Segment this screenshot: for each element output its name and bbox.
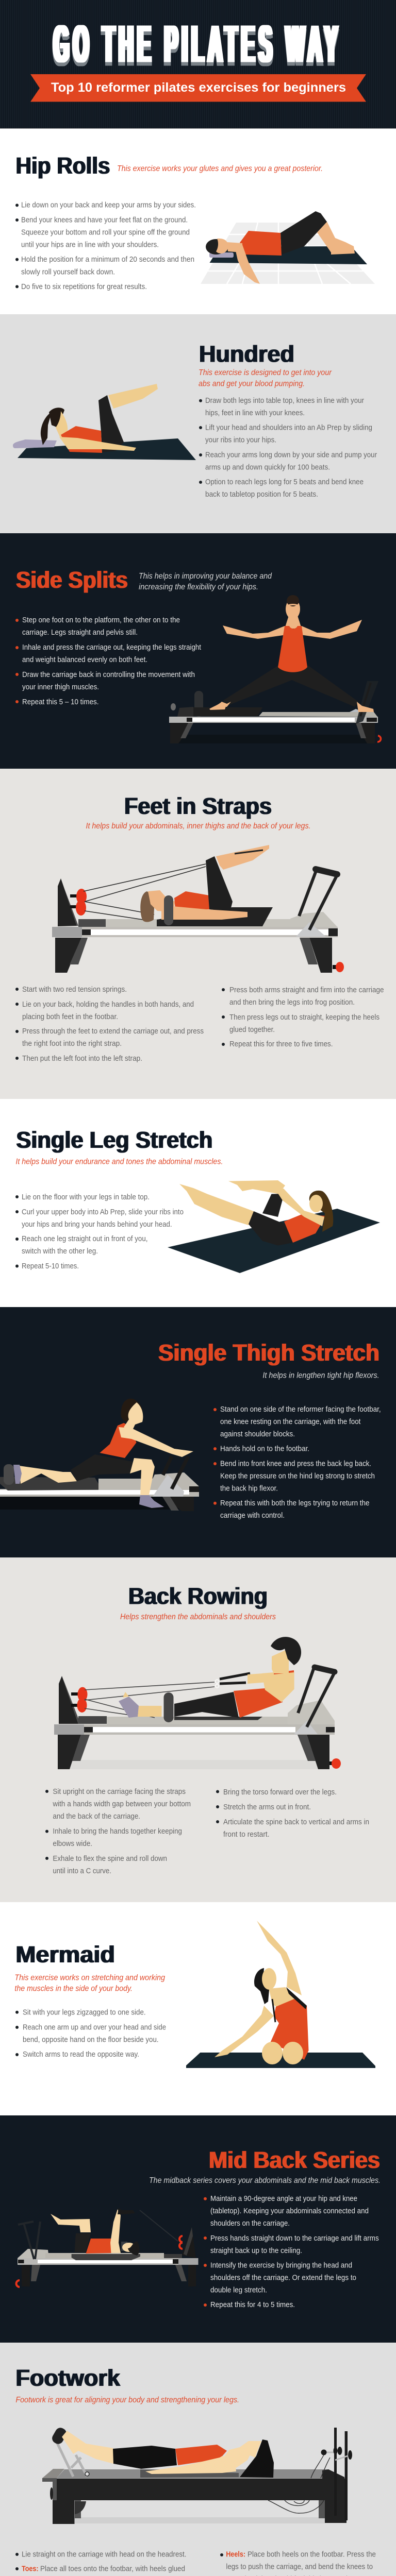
floor tiles xyxy=(201,223,375,284)
bullet list: Do five to six repetitions for great results. xyxy=(21,282,147,291)
illustration: back rowing xyxy=(54,1637,341,1769)
reformer xyxy=(52,864,344,973)
subtitle: It helps build your endurance and tones the abdominal muscles. xyxy=(15,1158,223,1166)
illustration: hundred xyxy=(13,384,196,460)
illustration: mid back series xyxy=(16,2208,199,2287)
subtitle: increasing the flexibility of your hips. xyxy=(139,583,258,591)
bullet list xyxy=(204,2194,379,2309)
bullet list: right: legs to push the carriage, and bend the knees to xyxy=(226,2563,373,2571)
person xyxy=(41,384,158,453)
bullet list: Hold the position for a minimum of 20 seconds and then xyxy=(21,255,194,264)
bullet list: left: Start with two red tension springs. xyxy=(22,985,127,994)
bullet list: Repeat 5-10 times. xyxy=(22,1262,79,1270)
mat xyxy=(209,246,367,264)
bullet list xyxy=(15,201,196,291)
subtitle: This helps in improving your balance and xyxy=(139,572,272,581)
bullet list: hips, feet in line with your knees. xyxy=(205,409,305,417)
person xyxy=(62,2431,274,2478)
bullet list: Bend into front knee and press the back leg back. xyxy=(220,1460,371,1468)
illustration: feet in straps xyxy=(52,845,344,973)
mat xyxy=(186,2053,375,2068)
pillow xyxy=(209,252,234,258)
bullet list: Reach your arms long down by your side and pump your xyxy=(205,450,377,460)
bullet list: shoulders off the carriage. Or extend the legs to xyxy=(210,2274,356,2282)
reformer xyxy=(42,2426,352,2524)
bullet list: Inhale and press the carriage out, keeping the legs straight xyxy=(22,643,202,652)
bullet list: left: Sit upright on the carriage facing the straps xyxy=(53,1787,186,1796)
heading: single leg stretch: Single Leg Stretch xyxy=(16,1127,212,1153)
bullet list: arms up and down quickly for 100 beats. xyxy=(205,463,330,472)
bullet list: right: glued together. xyxy=(229,1025,275,1034)
heading: single thigh stretch: Single Thigh Stretch xyxy=(158,1340,380,1366)
bullet list: your hips and bring your hands behind your head. xyxy=(22,1220,172,1229)
bullet list xyxy=(199,396,377,499)
bullet list: shoulders on the carriage. xyxy=(210,2219,290,2228)
bullet list: left: Place all toes onto the footbar, with heels glued xyxy=(40,2565,185,2573)
bullet list: left xyxy=(15,2550,201,2576)
heading: mermaid: Mermaid xyxy=(15,1941,115,1968)
bullet list: your inner thigh muscles. xyxy=(22,683,99,691)
illustration: side splits xyxy=(169,595,381,743)
subtitle: This exercise works your glutes and gives you a great posterior. xyxy=(117,164,323,173)
panel: single leg stretch xyxy=(0,1099,396,1307)
bullet list: Maintain a 90-degree angle at your hip and knee xyxy=(210,2194,357,2203)
heading: side splits: Side Splits xyxy=(16,567,128,593)
bullet list: right: Stretch the arms out in front. xyxy=(223,1803,311,1811)
bullet list: Reach one leg straight out in front of you, xyxy=(22,1234,147,1243)
heading: mid back series: Mid Back Series xyxy=(209,2147,380,2173)
bullet list: Keep the pressure on the hind leg strong to stretch xyxy=(220,1472,375,1481)
bullet list: left: Inhale to bring the hands together keeping xyxy=(53,1827,182,1836)
subtitle: abs and get your blood pumping. xyxy=(199,379,305,388)
panel: single thigh stretch xyxy=(0,1307,396,1557)
bullet list: switch with the other leg. xyxy=(22,1247,98,1256)
bullet list: right: Then press legs out to straight, keeping the heels xyxy=(229,1013,380,1022)
subtitle: the muscles in the side of your body. xyxy=(14,1985,133,1993)
bullet list: right: Heels: xyxy=(226,2550,245,2559)
panel: feet in straps xyxy=(0,769,396,1099)
subtitle xyxy=(139,572,272,591)
bullet list xyxy=(15,1193,184,1270)
ribbon banner: Top 10 reformer pilates exercises for beginners xyxy=(51,80,346,95)
bullet list: straight back up to the ceiling. xyxy=(210,2246,302,2255)
bullet list: carriage with control. xyxy=(220,1511,285,1520)
bullet list: Draw both legs into table top, knees in line with your xyxy=(205,396,364,405)
person xyxy=(13,1399,193,1508)
person xyxy=(179,1180,333,1246)
bullet list: left: Then put the left foot into the left strap. xyxy=(22,1054,142,1063)
bullet list: Press hands straight down to the carriage and lift arms xyxy=(210,2234,379,2243)
bullet list xyxy=(213,1405,381,1520)
bullet list: Option to reach legs long for 5 beats and bend knee xyxy=(205,478,364,486)
panel: mid back series xyxy=(0,2115,396,2343)
bullet list: Squeeze your bottom and roll your spine off the ground xyxy=(21,228,190,236)
subtitle: This exercise works on stretching and working xyxy=(14,1974,165,1982)
subtitle: Helps strengthen the abdominals and shoulders xyxy=(120,1613,276,1621)
ribbon banner xyxy=(30,74,366,102)
bullet list: left: with a hands width gap between your bottom xyxy=(52,1800,191,1808)
subtitle: It helps in lengthen tight hip flexors. xyxy=(262,1371,380,1380)
bullet list: Bend your knees and have your feet flat on the ground. xyxy=(21,215,188,224)
reformer xyxy=(0,1456,199,1511)
person xyxy=(209,595,374,712)
bullet list: right: Press both arms straight and firm into the carriage xyxy=(229,986,384,994)
reformer xyxy=(16,2210,199,2287)
bullet list: right: Place both heels on the footbar. Press the xyxy=(248,2550,376,2559)
person xyxy=(51,2208,140,2260)
panel: mermaid xyxy=(0,1902,396,2115)
person xyxy=(119,1637,301,1722)
bullet list: right xyxy=(222,986,384,1048)
bullet list: Draw the carriage back in controlling the movement with xyxy=(22,670,195,679)
bullet list: until your hips are in line with your shoulders. xyxy=(21,240,159,249)
bullet list: Stand on one side of the reformer facing the footbar, xyxy=(220,1405,381,1414)
subtitle xyxy=(14,1974,165,1993)
bullet list: (tabletop). Keeping your abdominals connected and xyxy=(210,2207,369,2215)
heading: back rowing: Back Rowing xyxy=(128,1583,268,1609)
illustration: footwork xyxy=(42,2426,352,2524)
pillow xyxy=(13,439,57,448)
bullet list: left: until into a C curve. xyxy=(53,1867,111,1875)
bullet list: and weight balanced evenly on both feet. xyxy=(22,655,147,664)
bullet list: Curl your upper body into Ab Prep, slide your ribs into xyxy=(22,1208,184,1216)
bullet list: right: Repeat this for three to five times. xyxy=(229,1040,333,1048)
reformer xyxy=(54,1666,341,1769)
subtitle: Footwork is great for aligning your body and strengthening your legs. xyxy=(15,2396,239,2404)
bullet list: carriage. Legs straight and pelvis still. xyxy=(22,628,138,637)
panel: header xyxy=(0,0,396,129)
bullet list: left: Lie straight on the carriage with head on the headrest. xyxy=(22,2550,187,2559)
bullet list: the back hip flexor. xyxy=(220,1484,278,1493)
bullet list: left: placing both feet in the footbar. xyxy=(22,1012,118,1021)
panel: hundred xyxy=(0,314,396,533)
illustration: single leg stretch xyxy=(168,1180,380,1273)
subtitle: It helps build your abdominals, inner thighs and the back of your legs. xyxy=(86,822,310,831)
panel: side splits xyxy=(0,533,396,769)
bullet list: left: Exhale to flex the spine and roll down xyxy=(53,1854,167,1863)
panel: hip rolls xyxy=(0,129,396,314)
reformer xyxy=(169,681,381,743)
heading: hundred: Hundred xyxy=(199,341,294,367)
bullet list: Reach one arm up and over your head and side xyxy=(23,2023,166,2032)
subtitle xyxy=(199,368,332,388)
bullet list: Intensify the exercise by bringing the head and xyxy=(210,2261,352,2270)
bullet list: right: Bring the torso forward over the legs. xyxy=(223,1788,337,1797)
bullet list: left: Press through the feet to extend the carriage out, and press xyxy=(22,1027,204,1036)
bullet list: one knee resting on the carriage, with the foot xyxy=(220,1417,361,1426)
illustration: hip rolls xyxy=(201,211,375,284)
bullet list: Repeat this with both the legs trying to return the xyxy=(220,1499,369,1507)
mat xyxy=(18,438,196,460)
bullet list: Hands hold on to the footbar. xyxy=(220,1445,309,1453)
bullet list: Lie down on your back and keep your arms by your sides. xyxy=(21,201,196,210)
mat xyxy=(168,1209,380,1273)
bullet list xyxy=(15,616,202,706)
person xyxy=(206,211,355,284)
panel: footwork xyxy=(0,2343,396,2576)
panel: back rowing xyxy=(0,1557,396,1902)
bullet list: right xyxy=(216,1788,369,1839)
heading: feet in straps: Feet in Straps xyxy=(124,793,272,819)
heading: hip rolls: Hip Rolls xyxy=(15,152,110,179)
bullet list: Lift your head and shoulders into an Ab Prep by sliding xyxy=(205,423,372,432)
bullet list: left xyxy=(45,1787,191,1875)
bullet list: left xyxy=(15,985,204,1063)
bullet list: left: and the back of the carriage. xyxy=(53,1812,140,1821)
bullet list: left: the right foot into the right strap. xyxy=(22,1039,122,1048)
bullet list: back to tabletop position for 5 beats. xyxy=(205,490,318,499)
bullet list: bend, opposite hand on the floor beside you. xyxy=(23,2036,159,2044)
person xyxy=(214,1921,308,2064)
bullet list: Repeat this 5 – 10 times. xyxy=(22,698,99,706)
bullet list: left: Toes: xyxy=(22,2565,38,2573)
bullet list: Repeat this for 4 to 5 times. xyxy=(210,2300,295,2309)
bullet list: right: front to restart. xyxy=(223,1830,270,1839)
bullet list: Step one foot on to the platform, the other on to the xyxy=(22,616,180,624)
bullet list xyxy=(15,2008,166,2059)
illustration: mermaid xyxy=(186,1921,375,2068)
bullet list: against shoulder blocks. xyxy=(220,1430,295,1438)
bullet list: left: Lie on your back, holding the handles in both hands, and xyxy=(22,1000,194,1009)
heading: footwork: Footwork xyxy=(15,2365,121,2391)
bullet list: left: elbows wide. xyxy=(53,1839,92,1848)
bullet list: right: Articulate the spine back to vertical and arms in xyxy=(223,1818,369,1826)
bullet list: right xyxy=(220,2550,376,2576)
person xyxy=(140,845,269,925)
bullet list: double leg stretch. xyxy=(210,2286,267,2295)
bullet list: Switch arms to read the opposite way. xyxy=(23,2050,139,2059)
bullet list: right: and then bring the legs into frog position. xyxy=(229,998,355,1007)
bullet list: slowly roll yourself back down. xyxy=(21,267,115,276)
bullet list: Sit with your legs zigzagged to one side. xyxy=(23,2008,146,2017)
subtitle: This exercise is designed to get into your xyxy=(199,368,332,377)
bullet list: your ribs into your hips. xyxy=(205,436,276,445)
illustration: single thigh stretch xyxy=(0,1399,199,1511)
bullet list: Lie on the floor with your legs in table top. xyxy=(22,1193,150,1201)
